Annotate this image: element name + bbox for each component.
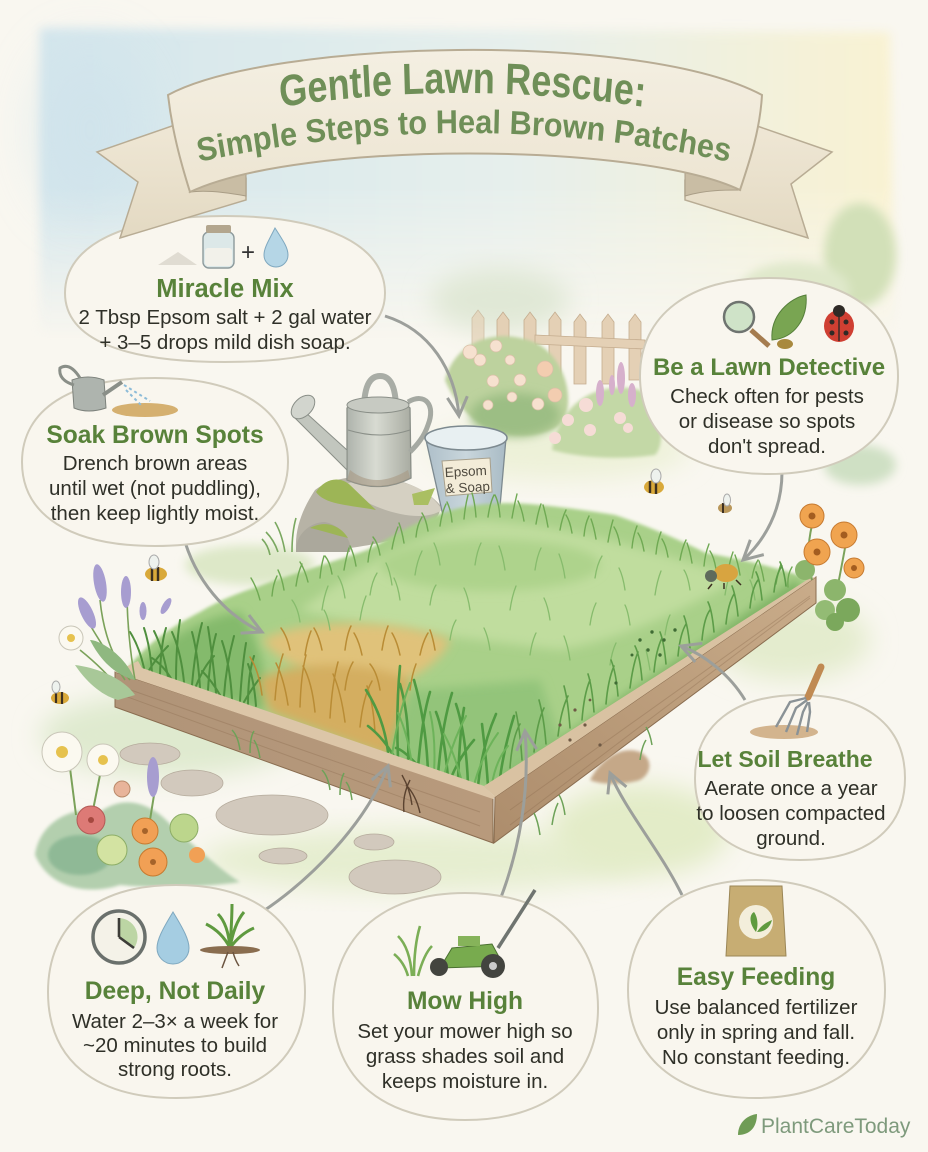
wooden fence [472,310,645,384]
arrow: miracle mix to bucket [385,316,459,416]
panel: soak brown spots [22,366,288,546]
heading: miracle mix: Miracle Mix [156,275,294,303]
banner left tail [97,126,246,238]
panel: let soil breathe [695,667,905,860]
icon: clock, drop, grass [93,904,260,968]
panel: be a lawn detective [640,278,898,474]
icon: magnifier, leaf, ladybug [724,295,854,349]
stepping stones [120,743,441,894]
heading: be a lawn detective: Be a Lawn Detective [653,354,885,381]
text: mowing directions: Set your mower high so [357,1020,573,1043]
text: deep watering directions: ~20 minutes to build [83,1034,267,1057]
heading: soak brown spots: Soak Brown Spots [46,422,264,449]
panel: mow high [333,890,598,1120]
daisies [42,732,119,776]
text: soak directions: Drench brown areas [63,452,247,475]
arrow: feeding to soil [610,773,682,895]
flower bed foliage [35,802,240,890]
banner right tail [685,126,832,238]
icon: fertilizer bag [726,886,786,956]
lavender and daisy near bed [59,563,174,700]
icon: watering can and dry patch [60,366,178,417]
brand logo: PlantCareToday [761,1115,911,1138]
arrow: mow to grass [498,731,526,905]
watering can illustration [287,376,431,487]
heading: let soil breathe: Let Soil Breathe [697,746,873,772]
text: detective directions: Check often for pests [670,385,864,408]
right nasturtium flowers [795,504,864,631]
arrow: detective to beetle [743,472,782,560]
title line one: Gentle Lawn Rescue: [280,64,644,106]
title banner [96,48,834,239]
left wildflowers [35,563,240,890]
panel: deep not daily [48,885,305,1098]
icon: lawn mower [394,890,535,978]
text: mowing directions: keeps moisture in. [382,1070,548,1093]
arrow: deep to roots [262,766,388,912]
Epsom and soap bucket: & Soap [445,479,490,496]
small grass tufts around bed [232,727,652,835]
text: detective directions: don't spread. [708,435,826,458]
grass tuft beside rock [262,518,296,555]
heading: deep not daily: Deep, Not Daily [85,978,266,1005]
panel: easy feeding [628,880,885,1098]
flowering shrubs [445,336,661,458]
arrow: soil to lawn [681,646,745,700]
icon: salt, jar, water drop: + [241,239,255,266]
arrow: soak to brown patch [183,535,262,632]
panel: miracle mix [65,216,385,362]
text: soil directions: ground. [756,827,826,850]
text: miracle mix directions: + 3–5 drops mild dish soap. [99,331,351,354]
text: miracle mix directions: 2 Tbsp Epsom salt + 2 gal water [78,306,372,329]
watercolor background washes [40,28,896,892]
grass blades [130,493,792,786]
bees and beetle [51,469,741,704]
text: detective directions: or disease so spots [679,410,855,433]
text: deep watering directions: strong roots. [118,1058,232,1081]
title line two: Simple Steps to Heal Brown Patches [198,110,730,161]
text: soak directions: then keep lightly moist. [51,502,259,525]
text: soil directions: Aerate once a year [704,777,878,800]
text: soak directions: until wet (not puddling), [49,477,261,500]
text: soil directions: to loosen compacted [696,802,886,825]
Epsom and soap bucket: Epsom [444,463,487,480]
wooden bed frame [115,577,816,843]
rock with moss [296,476,442,552]
soil mound and scatter [558,699,649,784]
banner ribbon [168,50,762,192]
text: deep watering directions: Water 2–3× a week for [72,1010,278,1033]
text: mowing directions: grass shades soil and [366,1045,564,1068]
raised bed lawn [128,493,812,792]
heading: mow high: Mow High [407,988,523,1015]
icon: salt, jar, water drop [158,225,288,268]
text: feeding directions: Use balanced fertilizer [655,996,858,1019]
Epsom and soap bucket [425,426,507,520]
heading: easy feeding: Easy Feeding [677,964,835,991]
text: feeding directions: only in spring and fall. [657,1021,855,1044]
icon: garden fork [750,667,821,739]
text: feeding directions: No constant feeding. [662,1046,850,1069]
banner ribbon folds [190,172,740,196]
